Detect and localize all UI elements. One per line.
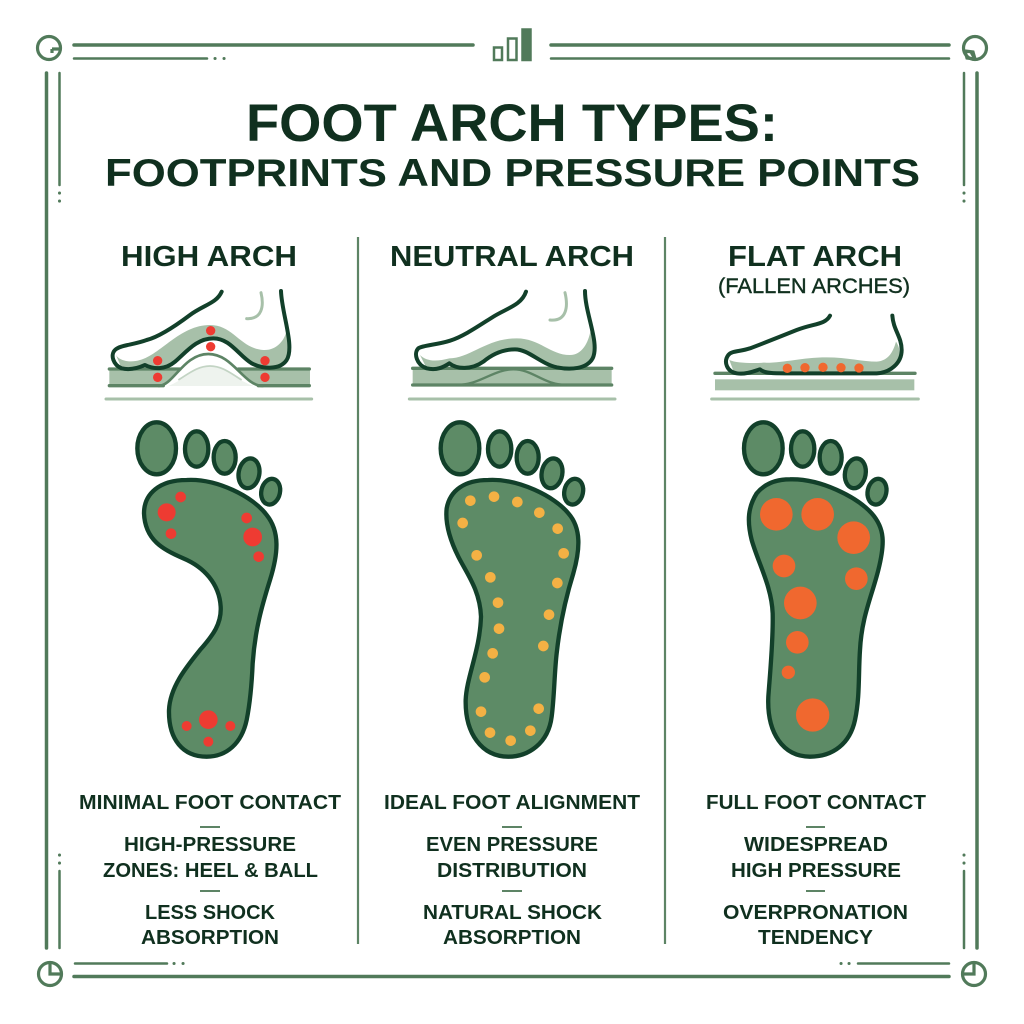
text: neutral arch facts: NATURAL SHOCK (423, 901, 602, 924)
icon: top-right corner ring (964, 36, 986, 60)
icon: bottom-left corner ring (38, 962, 62, 986)
panel: neutral arch (384, 241, 640, 949)
text: high arch facts: LESS SHOCK (145, 901, 275, 924)
icon: bottom-right corner ring (962, 962, 986, 986)
text: flat arch facts: FULL FOOT CONTACT (706, 791, 926, 814)
text: neutral arch facts: EVEN PRESSURE (426, 833, 598, 856)
title: FOOTPRINTS AND PRESSURE POINTS (105, 152, 920, 195)
footprint: flat arch (744, 422, 889, 757)
text: neutral arch facts (384, 791, 640, 949)
footprint: high arch (137, 422, 282, 757)
title (105, 94, 920, 195)
text: flat arch facts: TENDENCY (758, 926, 873, 949)
heading: neutral arch: NEUTRAL ARCH (390, 241, 634, 273)
title: FOOT ARCH TYPES: (246, 94, 778, 153)
panel: flat arch (706, 241, 926, 949)
text: high arch facts (79, 791, 341, 949)
side view: high arch (106, 291, 312, 399)
text: flat arch facts (706, 791, 926, 949)
side view: flat arch (712, 316, 918, 399)
icon: bar chart (494, 30, 530, 60)
text: flat arch facts: OVERPRONATION (723, 901, 908, 924)
text: high arch facts: ZONES: HEEL & BALL (103, 859, 318, 882)
text: neutral arch facts: DISTRIBUTION (437, 859, 587, 882)
heading: high arch: HIGH ARCH (121, 241, 297, 273)
text: high arch facts: HIGH-PRESSURE (124, 833, 296, 856)
text: neutral arch facts: IDEAL FOOT ALIGNMENT (384, 791, 640, 814)
text: high arch facts: MINIMAL FOOT CONTACT (79, 791, 341, 814)
side view: neutral arch (409, 291, 615, 399)
footprint: neutral arch (441, 422, 585, 757)
heading: flat arch: (FALLEN ARCHES) (718, 275, 910, 298)
heading: flat arch (718, 241, 910, 298)
panel: high arch (79, 241, 341, 949)
heading: flat arch: FLAT ARCH (728, 241, 902, 273)
text: neutral arch facts: ABSORPTION (443, 926, 581, 949)
icon: top-left corner ring (38, 36, 60, 60)
text: flat arch facts: WIDESPREAD (744, 833, 888, 856)
column dividers (358, 237, 665, 944)
text: high arch facts: ABSORPTION (141, 926, 279, 949)
text: flat arch facts: HIGH PRESSURE (731, 859, 901, 882)
